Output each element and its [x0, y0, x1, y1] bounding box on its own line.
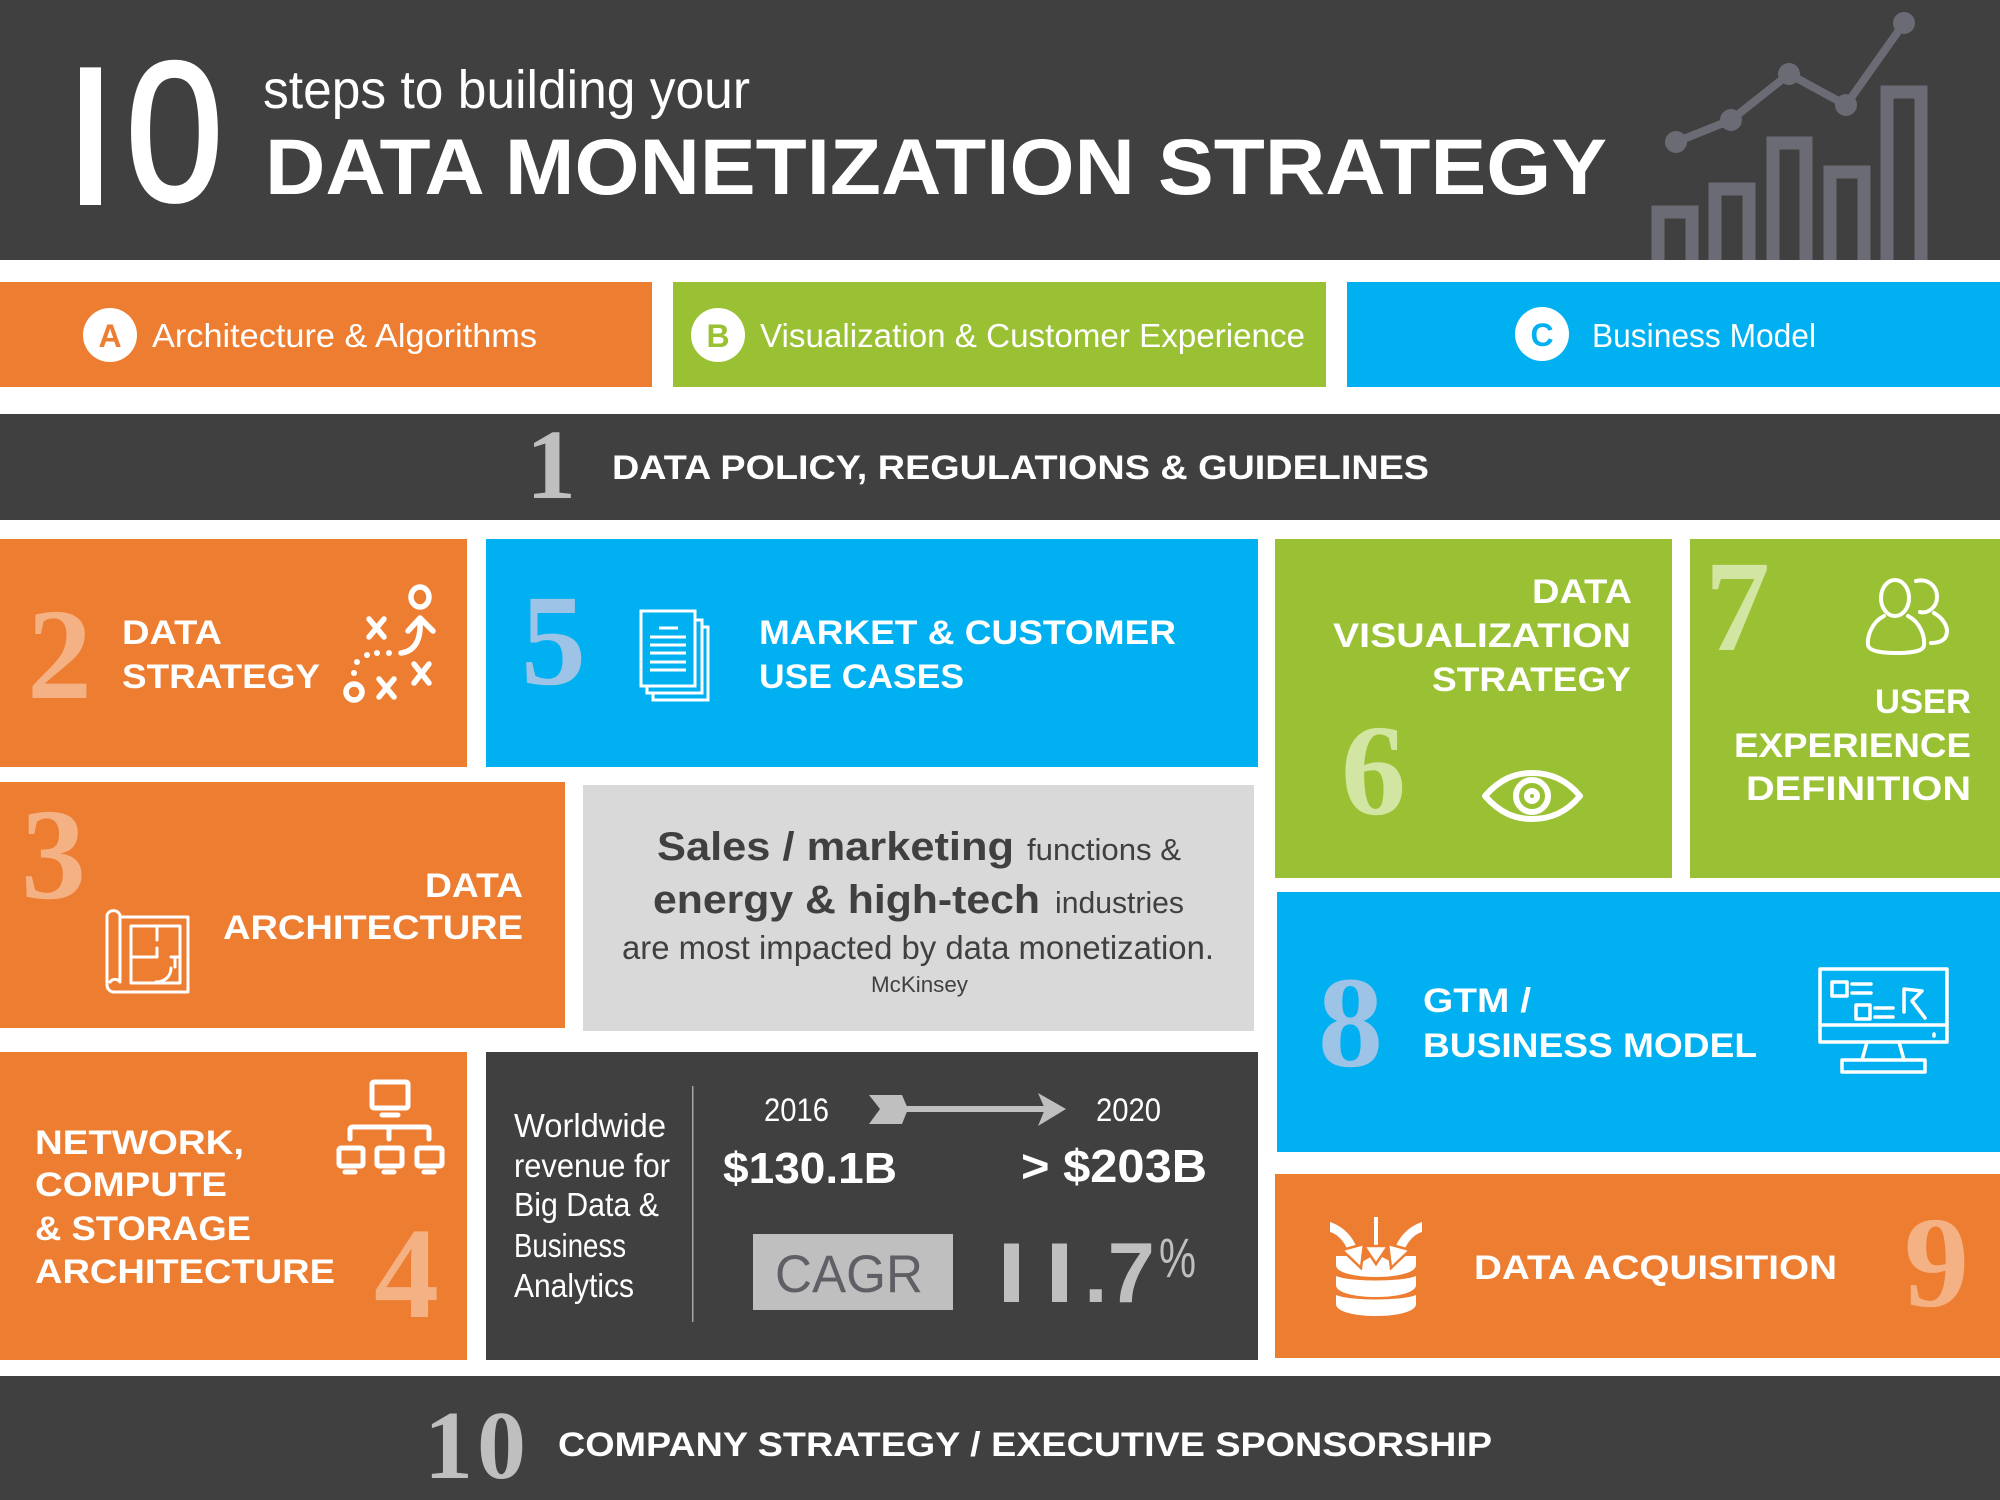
panel: step 4 network compute and storage architecture: COMPUTE [35, 1166, 227, 1204]
callout: McKinsey insight: industries [1055, 885, 1184, 920]
icon: growth chart [1658, 12, 1921, 260]
text: revenue description: Worldwide [514, 1107, 666, 1144]
panel: step 8 GTM business model: 8 [1318, 951, 1383, 1095]
panel: step 5 market and customer use cases: 5 [521, 569, 586, 713]
panel: step 6 data visualization strategy: 6 [1341, 699, 1406, 843]
panel: big data revenue statistics [486, 1052, 1258, 1360]
panel: step 5 market and customer use cases: MARKET & CUSTOMER [759, 614, 1176, 652]
panel: C business model: Business Model [1592, 317, 1816, 354]
panel: step 10 company strategy [0, 1376, 2000, 1500]
panel: step 8 GTM business model: BUSINESS MODEL [1423, 1027, 1757, 1065]
icon: database with inbound arrows [1330, 1217, 1422, 1316]
panel: step 9 data acquisition: DATA ACQUISITION [1474, 1249, 1837, 1287]
panel: C business model [1347, 282, 2000, 387]
panel: step 6 data visualization strategy [1275, 539, 1672, 878]
figure: CAGR percentage: % [1159, 1226, 1196, 1289]
text: revenue description: Business [514, 1227, 626, 1264]
panel: step 6 data visualization strategy: STRATEGY [1432, 661, 1631, 699]
big number 10: 1 [0, 24, 175, 248]
panel: step 3 data architecture: 3 [21, 783, 86, 927]
panel: step 7 user experience definition: EXPERIENCE [1734, 727, 1971, 765]
panel: step 8 GTM business model: GTM / [1423, 982, 1532, 1020]
panel: step 3 data architecture: ARCHITECTURE [223, 909, 523, 947]
badge: CAGR: CAGR [775, 1245, 923, 1304]
panel: step 4 network compute and storage architecture [0, 1052, 467, 1360]
big number 10: 0 [126, 21, 223, 242]
panel: step 8 GTM business model [1277, 892, 2000, 1152]
figure: 2020 revenue: > $203B [1021, 1140, 1207, 1192]
panel: step 5 market and customer use cases: USE CASES [759, 658, 964, 696]
panel: step 4 network compute and storage architecture: ARCHITECTURE [35, 1253, 335, 1291]
figure: CAGR percentage: 1 [985, 1226, 1127, 1320]
figure: CAGR percentage: .7 [1084, 1226, 1155, 1321]
panel: step 3 data architecture: DATA [425, 867, 523, 905]
panel: step 2 data strategy: 2 [27, 583, 92, 727]
panel: step 2 data strategy [0, 539, 467, 767]
panel: step 3 data architecture [0, 782, 565, 1028]
icon: network [339, 1082, 442, 1172]
panel: step 10 company strategy: 10 [424, 1392, 526, 1500]
label: 2020: 2020 [1096, 1092, 1161, 1128]
panel: A architecture and algorithms: Architecture & Algorithms [152, 317, 537, 354]
panel: step 6 data visualization strategy: VISUALIZATION [1333, 617, 1631, 655]
callout: McKinsey insight [583, 785, 1254, 1031]
big number 10 [80, 60, 218, 205]
panel: step 9 data acquisition [1275, 1174, 2000, 1358]
text: revenue description: Analytics [514, 1267, 634, 1304]
panel: step 10 company strategy: COMPANY STRATEGY / EXECUTIVE SPONSORSHIP [558, 1426, 1492, 1464]
text: revenue description [514, 1107, 670, 1304]
panel: A architecture and algorithms [0, 282, 652, 387]
arrow: 2016 to 2020 [869, 1093, 1066, 1126]
panel: step 1: 1 [526, 409, 576, 520]
panel: step 6 data visualization strategy: DATA [1532, 573, 1632, 611]
callout: McKinsey insight: Sales / marketing [657, 825, 1014, 869]
panel: step 2 data strategy: STRATEGY [122, 658, 320, 696]
panel: step 7 user experience definition: USER [1875, 683, 1971, 721]
callout: McKinsey insight: functions & [1027, 832, 1181, 867]
callout: McKinsey insight: are most impacted by data monetization. [622, 929, 1214, 966]
figure: 2016 revenue: $130.1B [723, 1144, 897, 1193]
callout: McKinsey insight: energy & high-tech [653, 878, 1040, 922]
icon: playbook [346, 587, 433, 700]
icon: monitor [1820, 969, 1947, 1072]
badge: CAGR [753, 1234, 953, 1310]
panel: step 7 user experience definition: DEFINITION [1746, 770, 1971, 808]
icon: documents [641, 611, 708, 700]
header panel [0, 0, 2000, 260]
figure: CAGR percentage: 1 [937, 1226, 1079, 1320]
text: revenue description: Big Data & [514, 1186, 659, 1223]
panel: step 9 data acquisition: 9 [1904, 1191, 1969, 1335]
icon: eye [1485, 773, 1580, 819]
panel: step 4 network compute and storage architecture: & STORAGE [35, 1210, 251, 1248]
panel: C business model: C [1530, 317, 1554, 353]
panel: step 1: DATA POLICY, REGULATIONS & GUIDELINES [612, 449, 1429, 487]
panel: B visualization and customer experience [673, 282, 1326, 387]
panel: step 7 user experience definition [1690, 535, 2000, 878]
panel: B visualization and customer experience: Visualization & Customer Experience [760, 317, 1305, 354]
panel: step 5 market and customer use cases [486, 539, 1258, 767]
panel: step 4 network compute and storage architecture: NETWORK, [35, 1124, 244, 1162]
panel: step 2 data strategy: DATA [122, 614, 222, 652]
text: revenue description: revenue for [514, 1147, 670, 1184]
panel: B visualization and customer experience: B [706, 318, 730, 354]
panel: step 4 network compute and storage architecture: 4 [374, 1202, 439, 1346]
title: DATA MONETIZATION STRATEGY [265, 122, 1607, 211]
figure: CAGR percentage [1004, 1238, 1194, 1302]
panel: A architecture and algorithms: A [98, 318, 122, 354]
icon: users [1868, 580, 1947, 653]
icon: blueprint [107, 911, 188, 992]
label: 2016: 2016 [764, 1092, 829, 1128]
panel: step 1 [0, 409, 2000, 520]
panel: step 7 user experience definition: 7 [1705, 535, 1770, 679]
subtitle: steps to building your [263, 60, 750, 120]
callout: McKinsey insight: McKinsey [871, 972, 968, 997]
